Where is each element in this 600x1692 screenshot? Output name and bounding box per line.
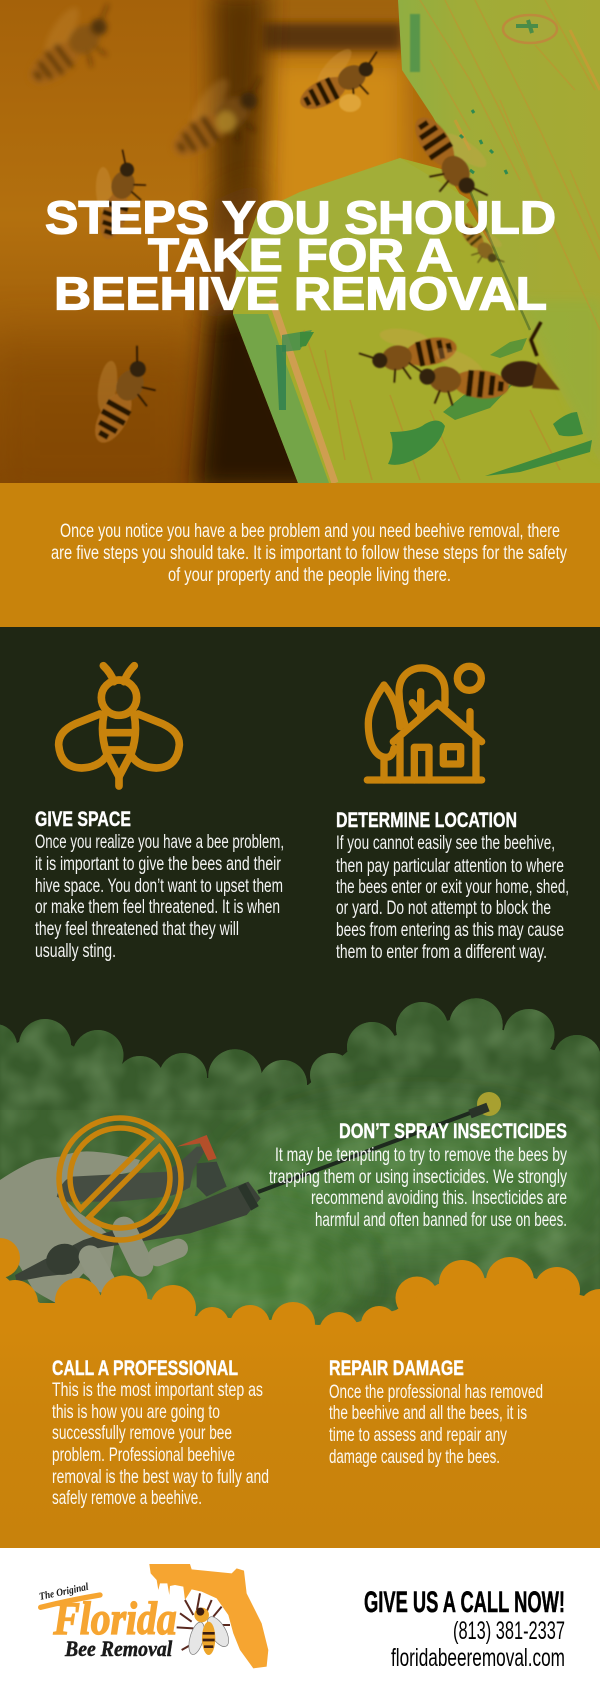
hero photo: bees on a hive <box>0 0 600 510</box>
intro text <box>51 521 567 586</box>
text: give space: hive space. You don’t want to upset them <box>35 876 283 897</box>
heading: repair damage: REPAIR DAMAGE <box>329 1356 464 1380</box>
text: call a professional: problem. Professional beehive <box>52 1445 235 1466</box>
Florida state shape <box>149 1564 268 1668</box>
sprayer body <box>15 1182 261 1282</box>
gloved palm <box>0 1151 140 1303</box>
text: repair damage <box>329 1382 543 1468</box>
text: give space: it is important to give the bees and their <box>35 854 281 875</box>
hive wood: lower beam <box>233 158 600 483</box>
hive shadows <box>300 332 592 476</box>
logo: Florida Bee Removal <box>38 1564 268 1668</box>
tagline: The Original <box>38 1582 90 1603</box>
script word: Florida <box>52 1593 177 1645</box>
icon: house and trees <box>367 666 482 780</box>
icon: bee <box>59 666 179 786</box>
text: repair damage: the beehive and all the bees, it is <box>329 1403 527 1424</box>
title: STEPS YOU SHOULD <box>45 192 556 244</box>
panel: spraying photo <box>0 990 600 1340</box>
text: call a professional: safely remove a beehive. <box>52 1488 202 1509</box>
text: give space: or make them feel threatened. It is when <box>35 897 280 918</box>
icon: no spraying sign <box>59 1118 181 1240</box>
wand and nozzle <box>258 1092 501 1192</box>
swash <box>41 1595 100 1607</box>
text: repair damage: damage caused by the bees. <box>329 1447 500 1468</box>
bee: blurred top left <box>30 2 111 84</box>
text: give space: Once you realize you have a bee problem, <box>35 832 284 853</box>
panel: intro <box>0 483 600 627</box>
text: give space: they feel threatened that they will <box>35 919 239 940</box>
word: Bee Removal: Bee Removal <box>64 1636 173 1661</box>
heading: call a professional: CALL A PROFESSIONAL <box>52 1356 238 1380</box>
panel: footer <box>0 1548 600 1692</box>
bees: on landing board <box>358 320 560 406</box>
heading: give space: GIVE SPACE <box>35 807 131 831</box>
heading: determine location: DETERMINE LOCATION <box>336 808 517 832</box>
sprayer trigger <box>57 1147 207 1202</box>
intro text: of your property and the people living there. <box>168 565 451 586</box>
text: call a professional: this is how you are going to <box>52 1402 220 1423</box>
bee: left mid <box>96 148 147 239</box>
gloved fingers <box>90 1257 104 1282</box>
title: BEEHIVE REMOVAL <box>54 268 547 320</box>
seam shadow <box>469 191 531 330</box>
text: call a professional: successfully remove your bee <box>52 1423 232 1444</box>
text: call a professional <box>52 1380 269 1509</box>
logo bee <box>177 1593 233 1656</box>
text: repair damage: time to assess and repair any <box>329 1425 507 1446</box>
text: call a professional: removal is the best way to fully and <box>52 1467 269 1488</box>
title <box>45 192 556 320</box>
hand holding sprayer <box>0 1135 261 1303</box>
call to action <box>364 1586 565 1672</box>
bee: on upper beam <box>416 118 505 264</box>
title: TAKE FOR A <box>148 229 453 281</box>
panel: orange steps with scalloped top <box>0 1238 600 1548</box>
bee: flying with pollen <box>300 49 378 112</box>
bee: blurred center <box>174 77 262 156</box>
text: give space <box>35 832 284 962</box>
text: call a professional: This is the most important step as <box>52 1380 263 1401</box>
hive wood: upper beam <box>398 0 600 462</box>
text: don't spray insecticides <box>269 1145 567 1231</box>
panel: dark steps <box>0 627 600 1087</box>
text: determine location <box>336 833 569 963</box>
bee: left lower <box>94 344 156 443</box>
text: give space: usually sting. <box>35 941 116 962</box>
